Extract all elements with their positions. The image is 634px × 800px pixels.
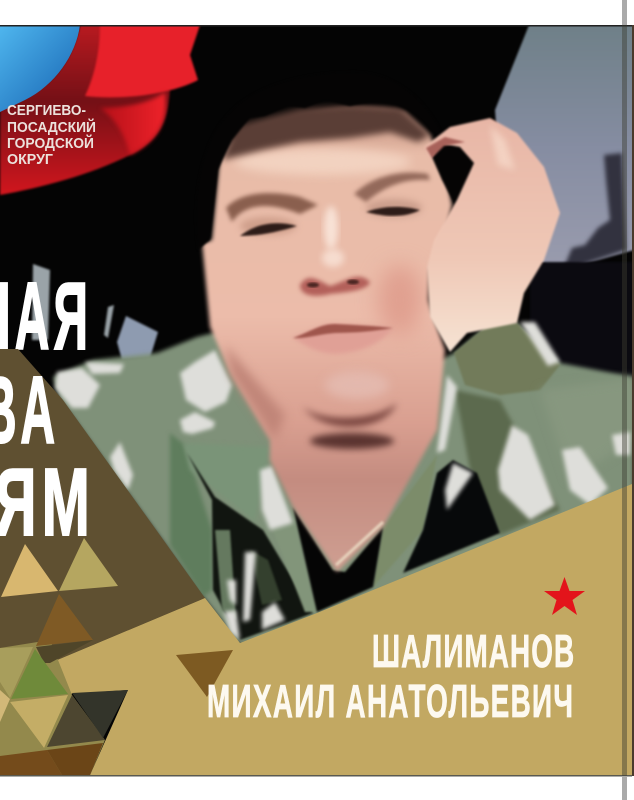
label: district name: СЕРГИЕВО-: [7, 103, 86, 119]
label: district name: ОКРУГ: [7, 152, 53, 168]
face and neck: [202, 107, 452, 572]
decoration: geometric triangles: [0, 538, 233, 775]
hand: [424, 118, 560, 352]
hair: [199, 101, 408, 249]
lips: [296, 330, 390, 354]
cheek shade: [378, 265, 422, 335]
title: lower heading lines: [0, 357, 90, 556]
left jaw shade: [225, 345, 285, 440]
panel: tan name banner: [50, 484, 632, 775]
nose bridge and tip light: [324, 206, 338, 250]
chin highlight and jaw shadows: [325, 371, 389, 399]
jacket: [53, 320, 634, 645]
photo: background objects behind title: [32, 264, 158, 360]
icon: red star: [544, 577, 585, 615]
right collar: [373, 455, 437, 587]
neck chain: [336, 522, 383, 565]
flag: tricolour ribbon: [0, 25, 200, 195]
forehead light: [235, 149, 411, 175]
nose base and nostrils: [300, 277, 370, 296]
photo: grey wall and tree silhouette: [495, 25, 634, 387]
strap and dark folds: [187, 453, 313, 640]
hand gap: [430, 150, 455, 204]
eyes: [240, 223, 297, 236]
name: surname and given names: [207, 626, 574, 728]
hair fringe: [222, 105, 430, 160]
label: district name: ГОРОДСКОЙ: [7, 134, 94, 152]
name: surname and given names: МИХАИЛ АНАТОЛЬЕВИЧ: [207, 676, 573, 728]
panel: brown triangle corner: [0, 349, 205, 680]
photo: man in camouflage jacket: [53, 72, 634, 645]
brows and eye sockets: [240, 217, 296, 235]
camouflage blotches: [55, 322, 630, 640]
label: district name: ПОСАДСКИЙ: [7, 118, 96, 136]
hand shading: [490, 129, 514, 169]
name: surname and given names: ШАЛИМАНОВ: [372, 626, 574, 678]
t-shirt: [293, 507, 383, 612]
label: district name: [8, 105, 96, 164]
